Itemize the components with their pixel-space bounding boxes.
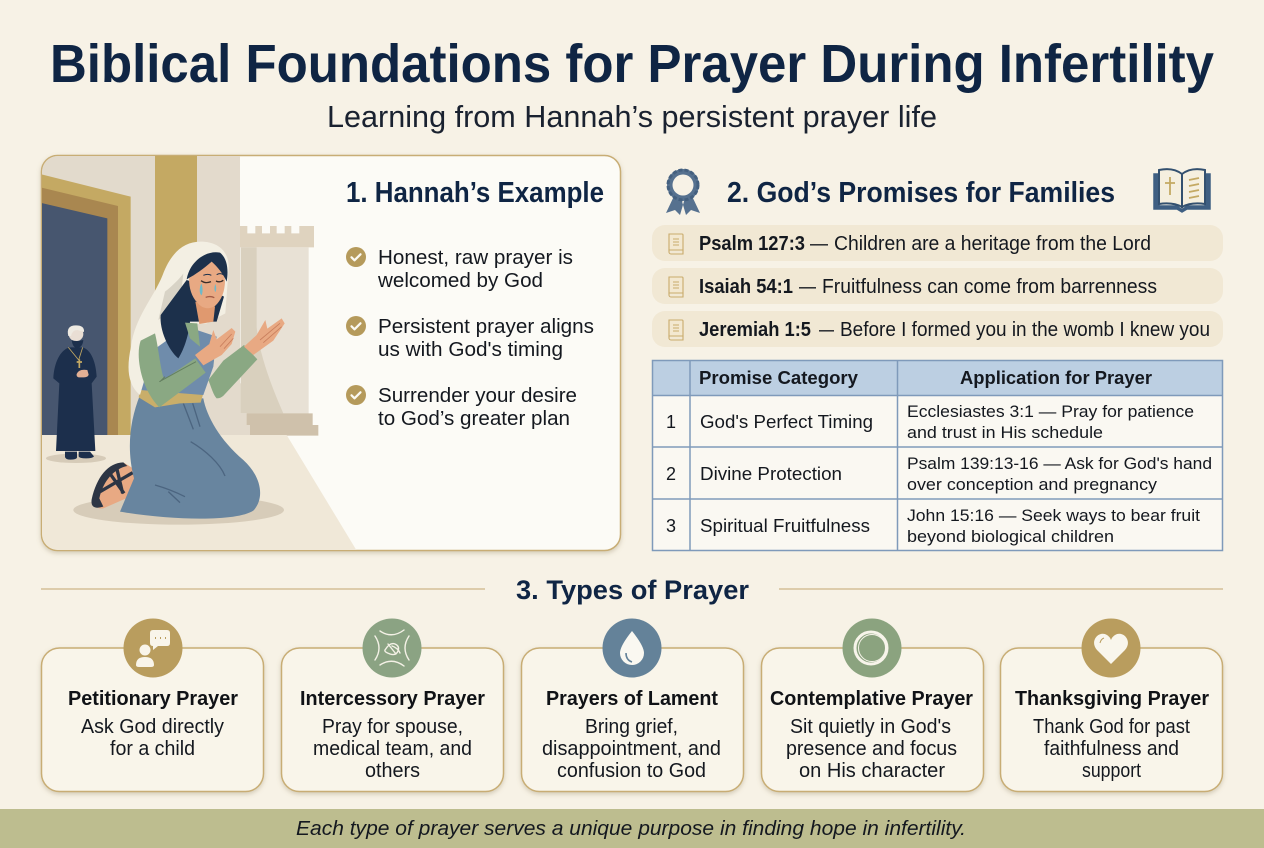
row 1: Ecclesiastes 3:1 — Pray for patience	[907, 402, 1194, 421]
verse: Jeremiah 1:5	[652, 311, 1223, 347]
priest figure	[46, 325, 106, 463]
verse: Psalm 127:3	[652, 225, 1223, 261]
card: Prayers of Lament: Bring grief,	[585, 716, 678, 738]
checklist item: persistent prayer	[346, 316, 594, 361]
icon: tear drop	[620, 631, 644, 665]
row 1	[666, 402, 1194, 442]
card: Intercessory Prayer: others	[365, 760, 420, 782]
row 1: 1	[666, 412, 676, 432]
row 3	[666, 506, 1200, 546]
card: Intercessory Prayer: Intercessory Prayer	[300, 688, 485, 710]
checklist item: honest prayer: welcomed by God	[377, 270, 543, 292]
table: promise categories	[652, 360, 1222, 550]
icon: award ribbon	[666, 169, 700, 215]
verse: Jeremiah 1:5: Before I formed you in the womb I knew you	[840, 319, 1210, 341]
row 3: John 15:16 — Seek ways to bear fruit	[907, 506, 1200, 525]
card: Prayers of Lament: confusion to God	[557, 760, 706, 782]
row 3: Spiritual Fruitfulness	[700, 516, 870, 536]
table header: Promise Category	[699, 368, 858, 388]
card: Petitionary Prayer: Petitionary Prayer	[68, 688, 238, 710]
checklist item: honest prayer: Honest, raw prayer is	[378, 247, 573, 269]
verse: Psalm 127:3: Psalm 127:3	[699, 233, 805, 255]
row 2: Divine Protection	[700, 464, 842, 484]
card: Contemplative Prayer: presence and focus	[786, 738, 957, 760]
row 2	[666, 454, 1212, 494]
checklist item: persistent prayer: us with God's timing	[378, 339, 563, 361]
card: Prayers of Lament	[522, 618, 744, 792]
panel: Hannah's example	[40, 150, 620, 553]
verse: Psalm 127:3: —	[810, 233, 828, 255]
title: Biblical Foundations for Prayer During Infertility	[50, 34, 1214, 94]
verse: Isaiah 54:1: —	[799, 276, 816, 298]
table header: Application for Prayer	[960, 368, 1152, 388]
icon: joined hands	[375, 630, 409, 666]
card: Thanksgiving Prayer: Thank God for past	[1033, 716, 1190, 738]
heading: 3. Types of Prayer: 3. Types of Prayer	[516, 575, 749, 605]
verse: Jeremiah 1:5: Jeremiah 1:5	[699, 319, 811, 341]
verse: Jeremiah 1:5: —	[819, 319, 834, 341]
icon: open Bible	[1154, 169, 1210, 212]
row 1: and trust in His schedule	[907, 423, 1103, 442]
card: Contemplative Prayer: Contemplative Prayer	[770, 688, 973, 710]
row 3: beyond biological children	[907, 527, 1114, 546]
row 3: 3	[666, 516, 676, 536]
heading: 1. Hannah's Example: 1. Hannah’s Example	[346, 177, 604, 209]
verse: Isaiah 54:1: Isaiah 54:1	[699, 276, 793, 298]
card: Prayers of Lament: Prayers of Lament	[546, 688, 718, 710]
verse: Psalm 127:3: Children are a heritage from the Lord	[834, 233, 1151, 255]
icon: heart	[1094, 634, 1128, 664]
row 2: Psalm 139:13-16 — Ask for God's hand	[907, 454, 1212, 473]
table header	[699, 368, 1152, 388]
illustration: Hannah praying in the temple	[40, 150, 358, 553]
checklist item: surrender: Surrender your desire	[378, 385, 577, 407]
card: Petitionary Prayer	[42, 618, 264, 792]
footer banner: Each type of prayer serves a unique purpose in finding hope in infertility.	[296, 818, 966, 840]
icon: circle of stillness	[855, 632, 887, 664]
card: Prayers of Lament: disappointment, and	[542, 738, 721, 760]
checklist item: persistent prayer: Persistent prayer aligns	[378, 316, 594, 338]
card: Intercessory Prayer: Pray for spouse,	[322, 716, 463, 738]
card: Intercessory Prayer	[282, 618, 504, 792]
row 2: 2	[666, 464, 676, 484]
icon: person with speech bubble	[136, 630, 170, 667]
card: Contemplative Prayer: Sit quietly in God's	[790, 716, 951, 738]
verse: Isaiah 54:1	[652, 268, 1223, 304]
card: Contemplative Prayer	[762, 618, 984, 792]
verse: Isaiah 54:1: Fruitfulness can come from barrenness	[822, 276, 1157, 298]
card: Contemplative Prayer: on His character	[799, 760, 945, 782]
checklist item: surrender: to God’s greater plan	[378, 408, 570, 430]
kneeling woman	[73, 242, 285, 525]
row 2: over conception and pregnancy	[907, 475, 1158, 494]
card: Thanksgiving Prayer	[1000, 618, 1222, 792]
checklist item: surrender	[346, 385, 577, 430]
footer banner	[0, 809, 1264, 848]
card: Petitionary Prayer: for a child	[110, 738, 195, 760]
card: Thanksgiving Prayer: faithfulness and	[1044, 738, 1179, 760]
heading: 2. God's Promises for Families: 2. God’s Promises for Families	[727, 177, 1115, 209]
subtitle: Learning from Hannah’s persistent prayer life	[327, 99, 937, 134]
card: Intercessory Prayer: medical team, and	[313, 738, 472, 760]
card: Thanksgiving Prayer: Thanksgiving Prayer	[1015, 688, 1209, 710]
checklist item: honest prayer	[346, 247, 573, 292]
row 1: God's Perfect Timing	[700, 412, 873, 432]
card: Petitionary Prayer: Ask God directly	[81, 716, 224, 738]
card: Thanksgiving Prayer: support	[1082, 760, 1141, 782]
